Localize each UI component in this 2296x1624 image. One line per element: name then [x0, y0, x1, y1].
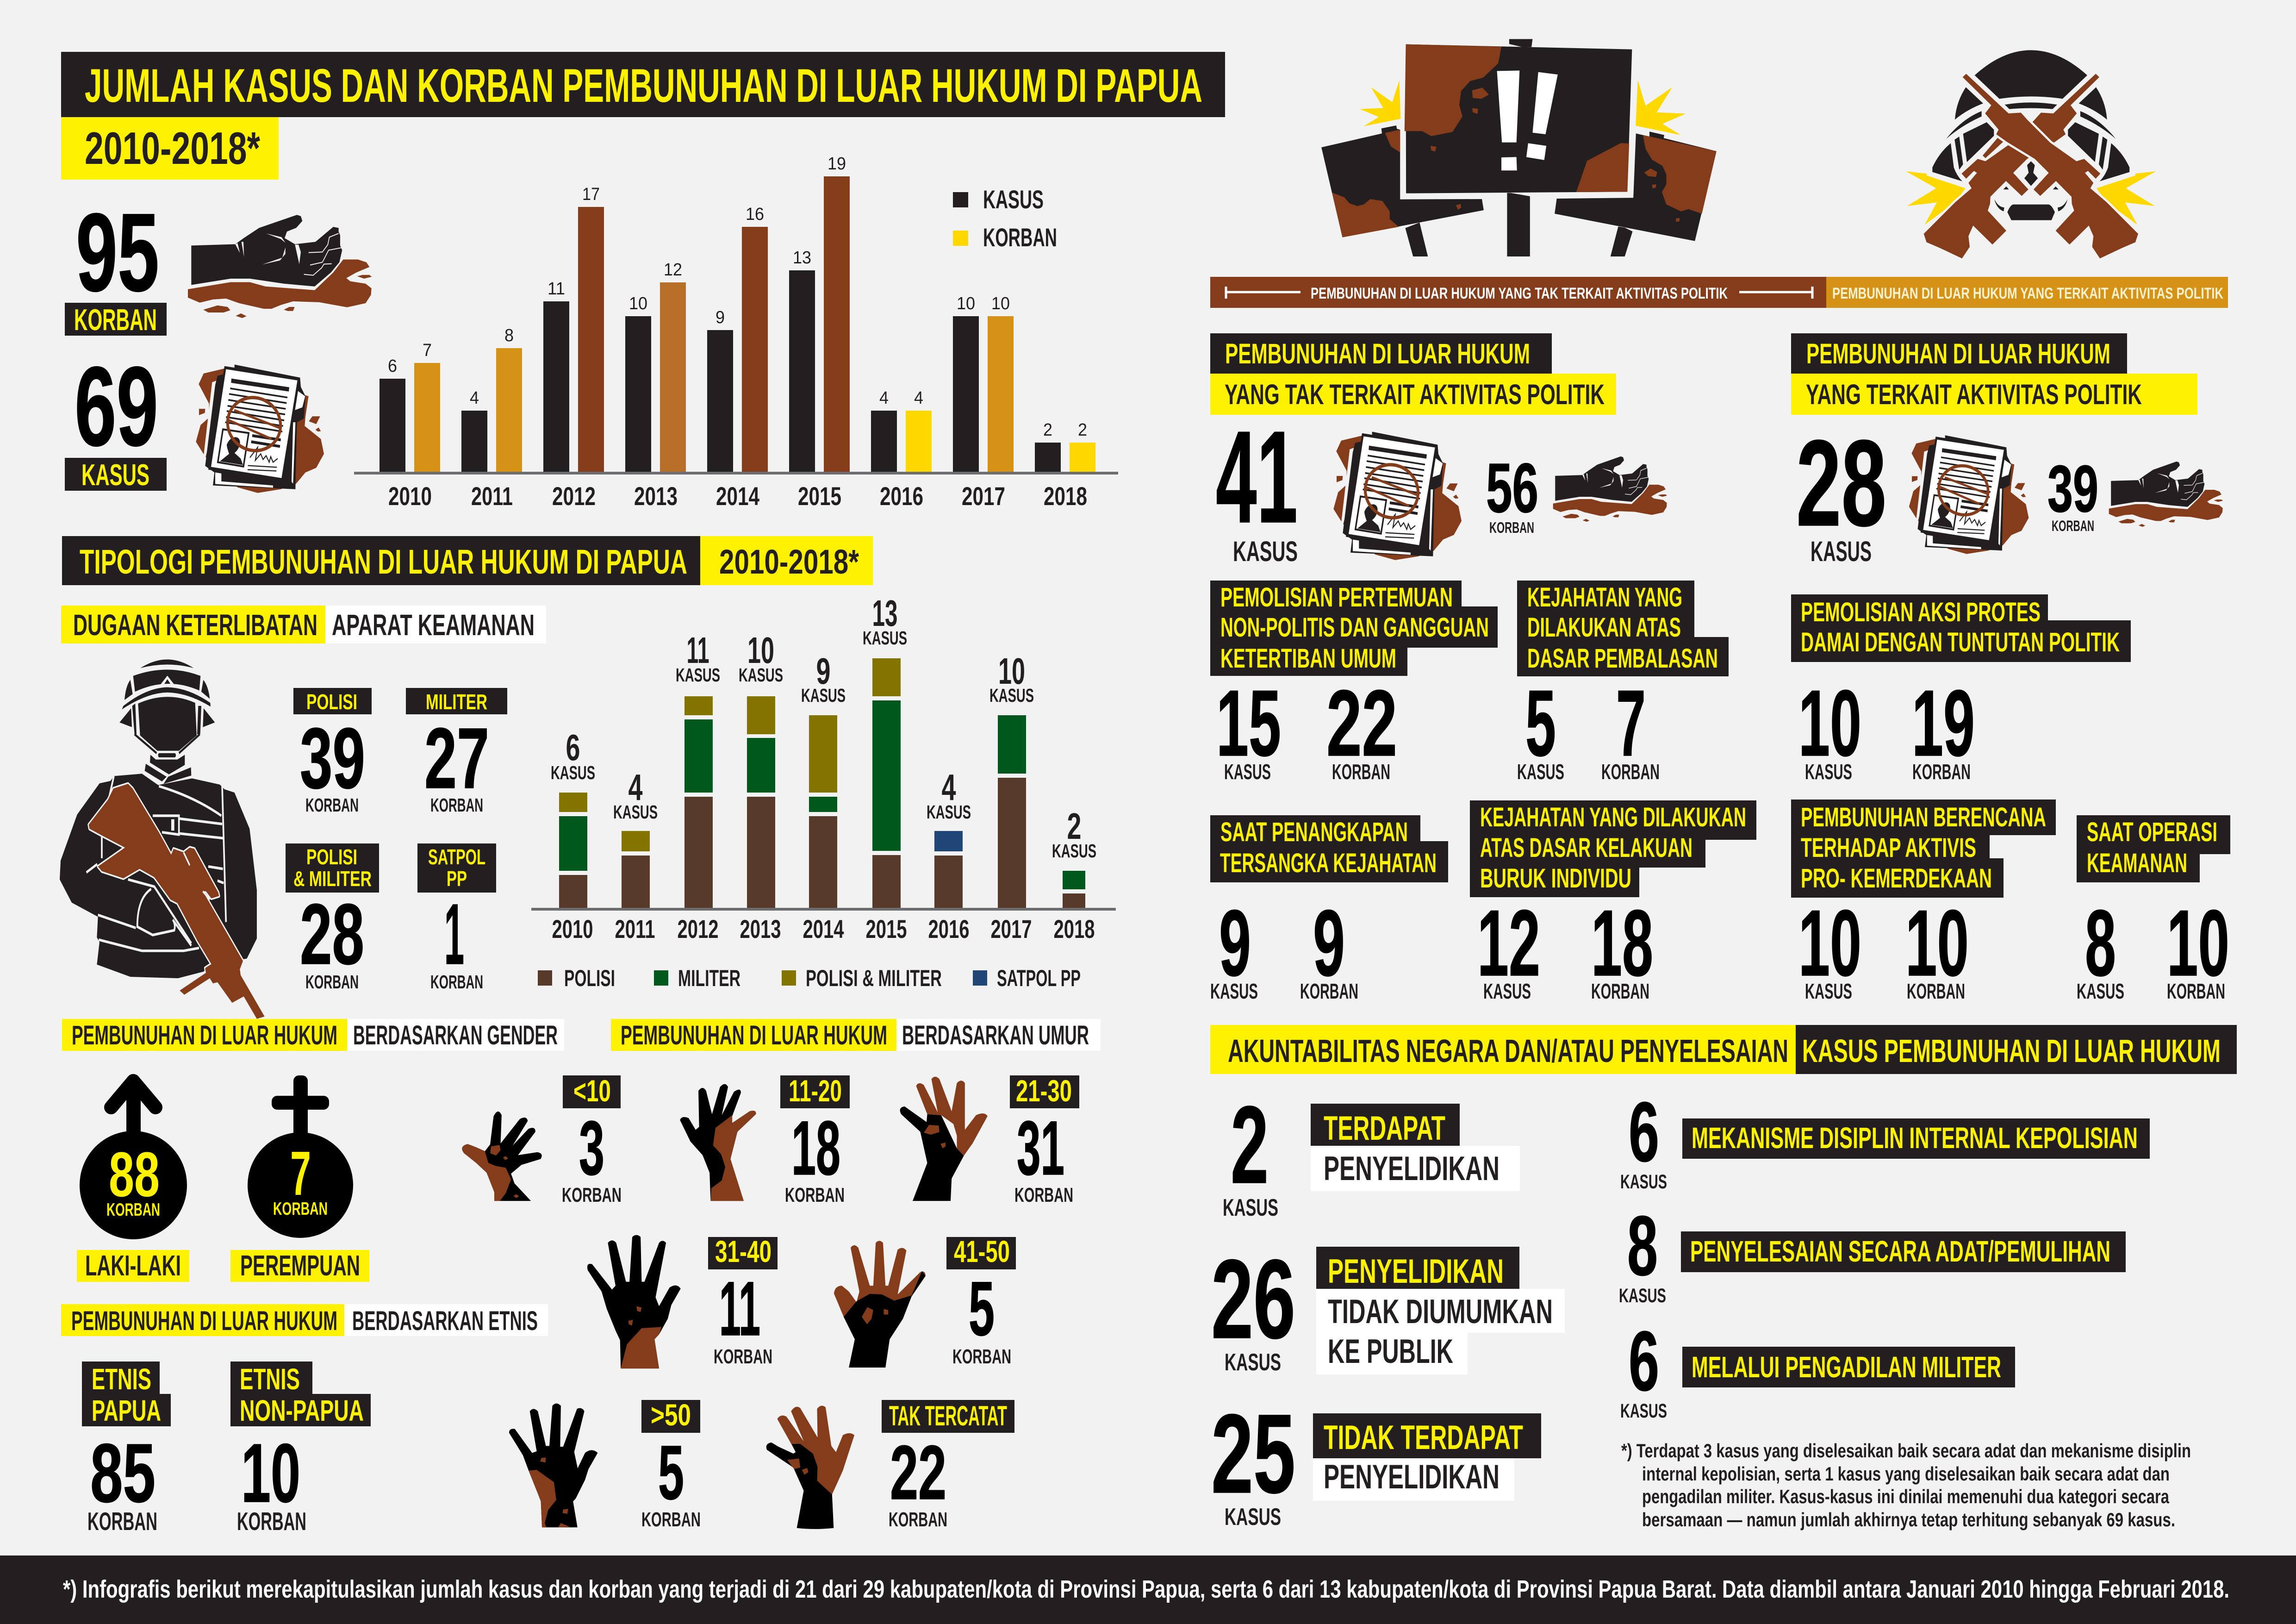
stat: 39 korban: [2047, 452, 2098, 534]
stacked bar chart: keterlibatan per tahun: 2012: [678, 914, 718, 943]
stacked bar chart: keterlibatan per tahun: 4: [941, 767, 956, 808]
icon: hand 11-20: [680, 1084, 756, 1201]
panel: pemolisian pertemuan: KASUS: [1224, 760, 1271, 784]
subheading: gender: PEMBUNUHAN DI LUAR HUKUM: [72, 1020, 337, 1050]
stat: polisi & militer 28 korban: KORBAN: [305, 971, 359, 993]
stat: usia 31-40: [708, 1234, 778, 1368]
stacked bar chart: keterlibatan per tahun: 9: [816, 650, 830, 692]
label: perempuan: PEREMPUAN: [240, 1250, 360, 1282]
panel: pemolisian pertemuan: PEMOLISIAN PERTEMUAN: [1220, 582, 1453, 612]
icon: female symbol 7 korban: 7: [290, 1138, 311, 1208]
stat: polisi & militer 28 korban: [286, 843, 379, 993]
bar chart: kasus and korban per year: 6: [388, 356, 397, 376]
bar chart: kasus and korban per year: 2017: [962, 481, 1005, 511]
bar chart: kasus and korban per year: 17: [582, 185, 600, 204]
panel: saat penangkapan: TERSANGKA KEJAHATAN: [1220, 848, 1437, 878]
panel: kejahatan pembalasan: DILAKUKAN ATAS: [1527, 612, 1681, 643]
stat: 2 kasus terdapat penyelidikan: 2: [1231, 1084, 1269, 1206]
panel: kejahatan pembalasan: [1517, 581, 1729, 784]
stat: 2 kasus terdapat penyelidikan: TERDAPAT: [1324, 1110, 1445, 1147]
stat: etnis non-papua 10 korban: NON-PAPUA: [240, 1394, 364, 1427]
subheading: gender: BERDASARKAN GENDER: [353, 1020, 558, 1050]
stat: etnis non-papua 10 korban: ETNIS: [240, 1362, 300, 1396]
bar chart: kasus and korban per year: 10: [991, 294, 1010, 313]
panel: kelakuan buruk individu: BURUK INDIVIDU: [1480, 863, 1631, 893]
panel: pemolisian pertemuan: 15: [1216, 671, 1281, 776]
panel: pembunuhan berencana: KASUS: [1805, 979, 1852, 1003]
stat: militer 27 korban: MILITER: [426, 690, 487, 714]
subheading: umur: BERDASARKAN UMUR: [902, 1020, 1089, 1050]
stat: usia 31-40: 31-40: [715, 1234, 772, 1268]
panel: kelakuan buruk individu: ATAS DASAR KELAKUAN: [1480, 833, 1692, 863]
stat: 26 kasus tidak diumumkan: PENYELIDIKAN: [1328, 1253, 1504, 1290]
stat: polisi & militer 28 korban: 28: [300, 887, 364, 982]
panel: kelakuan buruk individu: KASUS: [1483, 979, 1531, 1003]
panel: pemolisian aksi protes: [1791, 594, 2131, 784]
panel: saat operasi keamanan: 8: [2085, 891, 2116, 996]
stat: 56 korban: KORBAN: [1489, 519, 1534, 536]
label: perempuan: [230, 1250, 369, 1282]
stat: 6 kasus pengadilan militer: MELALUI PENGADILAN MILITER: [1692, 1350, 2001, 1384]
title period badge: [61, 117, 279, 180]
panel: pemolisian pertemuan: KETERTIBAN UMUM: [1220, 643, 1396, 674]
bar chart: kasus and korban per year: 4: [914, 388, 923, 408]
stat: usia 21-30: KORBAN: [1014, 1184, 1073, 1206]
heading: tak terkait aktivitas politik: PEMBUNUHAN DI LUAR HUKUM: [1225, 338, 1530, 369]
stat: 6 kasus mekanisme disiplin: [1620, 1084, 2150, 1193]
stacked bar chart: keterlibatan per tahun: KASUS: [863, 627, 907, 649]
icon: case documents left: [1333, 432, 1462, 560]
heading: terkait aktivitas politik: PEMBUNUHAN DI LUAR HUKUM: [1806, 338, 2110, 369]
stat: satpol pp 1 korban: PP: [447, 867, 467, 891]
panel: saat operasi keamanan: 10: [2167, 891, 2229, 996]
icon: protest signs: [1321, 39, 1717, 256]
stat: usia 21-30: 21-30: [1016, 1074, 1072, 1108]
icon: male symbol 88 korban: 88: [109, 1139, 160, 1210]
stat: etnis non-papua 10 korban: 10: [241, 1427, 300, 1520]
panel: saat penangkapan: [1210, 815, 1448, 1003]
stacked bar chart: keterlibatan per tahun: KASUS: [551, 762, 595, 783]
bar chart: kasus and korban per year: 2012: [552, 481, 596, 511]
bar chart: kasus and korban per year: 8: [504, 326, 514, 345]
stat: 69 kasus: KASUS: [81, 458, 149, 492]
icon: hand 31-40: [587, 1235, 681, 1368]
stat: 26 kasus tidak diumumkan: [1211, 1237, 1565, 1376]
legend: kasus korban: KORBAN: [983, 223, 1057, 252]
bar chart: kasus and korban per year: 13: [793, 248, 811, 268]
stat: usia 31-40: 11: [719, 1266, 760, 1352]
stat: usia 21-30: [1010, 1074, 1079, 1206]
stat: 69 kasus: 69: [75, 343, 158, 469]
legend: keterlibatan: [538, 965, 1081, 991]
bar chart: kasus and korban per year: 2013: [634, 481, 678, 511]
stat: militer 27 korban: KORBAN: [430, 794, 483, 816]
stat: etnis papua 85 korban: PAPUA: [92, 1394, 161, 1427]
band: kategori kasus: [1210, 277, 2228, 308]
stacked bar chart: keterlibatan per tahun: 10: [747, 630, 774, 671]
panel: saat penangkapan: 9: [1313, 891, 1345, 996]
stacked bar chart: keterlibatan per tahun: KASUS: [1052, 840, 1096, 862]
stat: satpol pp 1 korban: [417, 843, 496, 993]
panel: saat penangkapan: 9: [1219, 891, 1251, 996]
panel: pemolisian aksi protes: 19: [1912, 671, 1975, 776]
panel: pemolisian aksi protes: DAMAI DENGAN TUNTUTAN POLITIK: [1801, 627, 2120, 657]
panel: kelakuan buruk individu: KORBAN: [1591, 979, 1649, 1003]
stat: etnis non-papua 10 korban: [230, 1362, 371, 1536]
stat: tak tercatat: 22: [890, 1430, 946, 1516]
subheading: etnis: BERDASARKAN ETNIS: [352, 1306, 538, 1336]
stat: polisi 39 korban: 39: [300, 711, 365, 806]
panel: pemolisian aksi protes: 10: [1798, 671, 1861, 776]
stat: usia over 50: KORBAN: [641, 1508, 701, 1531]
stat: 56 korban: [1486, 449, 1538, 536]
stacked bar chart: keterlibatan per tahun: 4: [628, 767, 643, 808]
stat: 41 kasus: KASUS: [1233, 536, 1298, 567]
panel: saat penangkapan: SAAT PENANGKAPAN: [1220, 817, 1408, 847]
stat: 8 kasus penyelesaian adat: 8: [1627, 1198, 1658, 1293]
stat: 39 korban: 39: [2047, 452, 2098, 526]
stacked bar chart: keterlibatan per tahun: 2016: [928, 914, 969, 943]
panel: pembunuhan berencana: PRO- KEMERDEKAAN: [1801, 863, 1992, 893]
panel: pembunuhan berencana: 10: [1905, 891, 1969, 996]
stat: 95 korban: KORBAN: [74, 303, 157, 337]
stat: militer 27 korban: [406, 688, 507, 816]
panel: saat operasi keamanan: SAAT OPERASI: [2087, 817, 2217, 847]
legend: keterlibatan: SATPOL PP: [997, 965, 1081, 991]
stat: satpol pp 1 korban: 1: [444, 887, 464, 982]
bar chart: kasus and korban per year: 12: [664, 260, 682, 280]
heading: akuntabilitas: AKUNTABILITAS NEGARA DAN/ATAU PENYELESAIAN: [1228, 1033, 1788, 1069]
legend: kasus korban: KASUS: [983, 185, 1044, 214]
stacked bar chart: keterlibatan per tahun: [531, 593, 1116, 943]
stat: tak tercatat: TAK TERCATAT: [889, 1400, 1007, 1431]
legend: keterlibatan: POLISI: [564, 965, 615, 991]
stat: usia 11-20: [780, 1074, 850, 1206]
stat: usia over 50: >50: [651, 1398, 691, 1432]
heading: tipologi: TIPOLOGI PEMBUNUHAN DI LUAR HUKUM DI PAPUA: [80, 543, 687, 581]
stacked bar chart: keterlibatan per tahun: 2017: [990, 914, 1032, 943]
bar chart: kasus and korban per year: 19: [828, 154, 846, 174]
panel: pembunuhan berencana: KORBAN: [1907, 979, 1965, 1003]
panel: saat penangkapan: KORBAN: [1300, 979, 1358, 1003]
icon: hand 21-30: [900, 1077, 988, 1201]
bar chart: kasus and korban per year: 10: [629, 294, 647, 313]
stat: usia over 50: [641, 1398, 701, 1531]
stat: 39 korban: KORBAN: [2052, 518, 2094, 534]
bar chart: kasus and korban per year: 2014: [716, 481, 759, 511]
bar chart: kasus and korban per year: 2011: [471, 481, 513, 511]
panel: saat operasi keamanan: KASUS: [2077, 979, 2124, 1003]
bar chart: kasus and korban per year: 9: [716, 308, 725, 327]
stat: 8 kasus penyelesaian adat: [1619, 1198, 2126, 1307]
stacked bar chart: keterlibatan per tahun: 2013: [740, 914, 781, 943]
icon: hand under 10: [462, 1112, 542, 1201]
panel: pemolisian aksi protes: PEMOLISIAN AKSI PROTES: [1801, 597, 2041, 627]
stat: 28 kasus: KASUS: [1811, 536, 1872, 567]
panel: kelakuan buruk individu: KEJAHATAN YANG DILAKUKAN: [1480, 802, 1746, 832]
stacked bar chart: keterlibatan per tahun: 2014: [803, 914, 844, 943]
stacked bar chart: keterlibatan per tahun: KASUS: [927, 801, 971, 823]
title banner: [61, 52, 1225, 117]
stacked bar chart: keterlibatan per tahun: KASUS: [801, 685, 846, 706]
stat: polisi 39 korban: KORBAN: [305, 794, 359, 816]
footer note: [0, 1555, 2296, 1624]
icon: hand 41-50: [834, 1241, 926, 1368]
stat: usia 41-50: [946, 1234, 1016, 1368]
icon: fallen hand right: [2109, 462, 2223, 527]
bar chart: kasus and korban per year: 16: [746, 205, 764, 224]
stat: 6 kasus mekanisme disiplin: KASUS: [1620, 1171, 1667, 1193]
bar chart: kasus and korban per year: 2010: [388, 481, 432, 511]
panel: pembunuhan berencana: 10: [1798, 891, 1861, 996]
stat: 28 kasus: 28: [1796, 415, 1886, 552]
bar chart: kasus and korban per year: 10: [957, 294, 975, 313]
stat: etnis papua 85 korban: ETNIS: [92, 1362, 151, 1396]
stacked bar chart: keterlibatan per tahun: 13: [872, 593, 898, 634]
stat: usia 41-50: 41-50: [954, 1234, 1010, 1268]
icon: male symbol 88 korban: KORBAN: [106, 1200, 160, 1220]
icon: male symbol 88 korban: [80, 1081, 187, 1239]
stat: usia 11-20: 11-20: [789, 1074, 842, 1108]
stat: 26 kasus tidak diumumkan: KE PUBLIK: [1328, 1333, 1453, 1370]
bar chart: kasus and korban per year: 2018: [1044, 481, 1087, 511]
band: kategori kasus: PEMBUNUHAN DI LUAR HUKUM YANG TAK TERKAIT AKTIVITAS POLITIK: [1311, 285, 1728, 302]
footnote: internal kepolisian, serta 1 kasus yang diselesaikan baik secara adat dan: [1642, 1463, 2170, 1485]
icon: case documents right: [1909, 435, 2028, 554]
stacked bar chart: keterlibatan per tahun: 10: [998, 650, 1025, 692]
bar chart: kasus and korban per year: 2: [1078, 420, 1087, 440]
panel: kelakuan buruk individu: 12: [1477, 891, 1540, 996]
bar chart: kasus and korban per year: 4: [879, 388, 889, 408]
panel: saat operasi keamanan: KEAMANAN: [2087, 848, 2187, 878]
stat: 8 kasus penyelesaian adat: KASUS: [1619, 1285, 1666, 1307]
bar chart: kasus and korban per year: 2: [1043, 420, 1052, 440]
stacked bar chart: keterlibatan per tahun: 2: [1067, 806, 1081, 847]
heading: terkait aktivitas politik: YANG TERKAIT AKTIVITAS POLITIK: [1806, 379, 2142, 410]
stacked bar chart: keterlibatan per tahun: KASUS: [613, 801, 658, 823]
icon: fallen hand left: [1553, 456, 1667, 522]
heading: tak terkait aktivitas politik: [1210, 333, 1616, 415]
panel: pembunuhan berencana: [1791, 800, 2056, 1003]
icon: hand tak tercatat: [766, 1406, 854, 1529]
stat: usia under 10: <10: [573, 1074, 611, 1108]
panel: pembunuhan berencana: PEMBUNUHAN BERENCANA: [1801, 802, 2046, 832]
stacked bar chart: keterlibatan per tahun: KASUS: [739, 664, 783, 686]
stat: 26 kasus tidak diumumkan: KASUS: [1225, 1349, 1281, 1376]
stat: 2 kasus terdapat penyelidikan: PENYELIDIKAN: [1324, 1150, 1500, 1187]
stat: 2 kasus terdapat penyelidikan: [1223, 1084, 1520, 1221]
stat: 25 kasus tidak terdapat penyelidikan: [1211, 1391, 1541, 1530]
stacked bar chart: keterlibatan per tahun: 2015: [865, 914, 907, 943]
bar chart: kasus and korban per year: 2016: [880, 481, 923, 511]
stat: etnis papua 85 korban: [82, 1362, 171, 1536]
stat: usia under 10: [562, 1074, 622, 1206]
stacked bar chart: keterlibatan per tahun: 2010: [552, 914, 593, 943]
stat: 25 kasus tidak terdapat penyelidikan: PENYELIDIKAN: [1324, 1458, 1500, 1496]
panel: saat operasi keamanan: [2077, 815, 2230, 1003]
panel: kejahatan pembalasan: DASAR PEMBALASAN: [1527, 643, 1718, 674]
title banner: JUMLAH KASUS DAN KORBAN PEMBUNUHAN DI LUAR HUKUM DI PAPUA: [85, 59, 1202, 112]
stat: 26 kasus tidak diumumkan: 26: [1211, 1237, 1295, 1362]
subheading: etnis: PEMBUNUHAN DI LUAR HUKUM: [71, 1306, 337, 1336]
stacked bar chart: keterlibatan per tahun: 2011: [615, 914, 655, 943]
stat: usia 11-20: 18: [791, 1106, 840, 1191]
stat: 28 kasus: [1796, 415, 1886, 567]
stat: 6 kasus pengadilan militer: KASUS: [1620, 1400, 1667, 1422]
panel: pemolisian pertemuan: NON-POLITIS DAN GANGGUAN: [1220, 612, 1489, 643]
heading: terkait aktivitas politik: [1791, 333, 2197, 415]
panel: pemolisian pertemuan: [1210, 581, 1498, 784]
stat: 41 kasus: 41: [1216, 404, 1298, 550]
heading: tak terkait aktivitas politik: YANG TAK TERKAIT AKTIVITAS POLITIK: [1225, 379, 1605, 410]
panel: saat operasi keamanan: KORBAN: [2167, 979, 2225, 1003]
subheading: dugaan keterlibatan: DUGAAN KETERLIBATAN: [73, 608, 317, 642]
stat: 56 korban: 56: [1486, 449, 1538, 527]
legend: kasus korban: [953, 185, 1057, 252]
stacked bar chart: keterlibatan per tahun: 11: [687, 630, 709, 671]
stat: 41 kasus: [1216, 404, 1298, 567]
icon: case documents: [196, 365, 324, 493]
subheading: dugaan keterlibatan: [61, 606, 546, 643]
stat: 6 kasus mekanisme disiplin: 6: [1629, 1084, 1659, 1179]
stat: 25 kasus tidak terdapat penyelidikan: TIDAK TERDAPAT: [1324, 1419, 1523, 1456]
stat: 25 kasus tidak terdapat penyelidikan: KASUS: [1225, 1504, 1281, 1530]
bar chart: kasus and korban per year: 2015: [798, 481, 841, 511]
stat: usia 41-50: KORBAN: [952, 1345, 1011, 1368]
stat: usia under 10: 3: [579, 1106, 604, 1191]
footnote: [1621, 1440, 2191, 1530]
panel: kejahatan pembalasan: KASUS: [1517, 760, 1564, 784]
subheading: umur: PEMBUNUHAN DI LUAR HUKUM: [621, 1020, 887, 1050]
panel: kelakuan buruk individu: 18: [1591, 891, 1653, 996]
title period badge: 2010-2018*: [85, 123, 261, 174]
icon: female symbol 7 korban: [248, 1075, 353, 1238]
bar chart: kasus and korban per year: 11: [548, 279, 565, 299]
stat: polisi & militer 28 korban: & MILITER: [293, 867, 372, 891]
stat: etnis papua 85 korban: 85: [90, 1427, 156, 1520]
stat: usia 41-50: 5: [969, 1266, 995, 1352]
panel: pembunuhan berencana: TERHADAP AKTIVIS: [1801, 833, 1976, 863]
bar chart: kasus and korban per year: [354, 154, 1118, 511]
icon: fallen hand: [188, 215, 372, 318]
label: laki-laki: [77, 1250, 189, 1282]
stat: usia under 10: KORBAN: [562, 1184, 622, 1206]
panel: pemolisian aksi protes: KASUS: [1805, 760, 1852, 784]
stat: tak tercatat: KORBAN: [889, 1508, 947, 1531]
stat: militer 27 korban: 27: [424, 711, 489, 806]
stat: 26 kasus tidak diumumkan: TIDAK DIUMUMKAN: [1328, 1293, 1553, 1330]
stat: 69 kasus: [65, 343, 167, 492]
label: laki-laki: LAKI-LAKI: [85, 1250, 181, 1282]
panel: saat penangkapan: KASUS: [1210, 979, 1258, 1003]
stacked bar chart: keterlibatan per tahun: 6: [566, 727, 580, 768]
stat: usia 11-20: KORBAN: [785, 1184, 845, 1206]
stacked bar chart: keterlibatan per tahun: KASUS: [676, 664, 720, 686]
stacked bar chart: keterlibatan per tahun: KASUS: [989, 685, 1034, 706]
stat: usia 31-40: KORBAN: [714, 1345, 772, 1368]
stat: 6 kasus pengadilan militer: [1620, 1313, 2015, 1422]
stat: etnis papua 85 korban: KORBAN: [87, 1507, 157, 1536]
panel: pemolisian pertemuan: 22: [1326, 671, 1397, 776]
stat: 95 korban: [65, 190, 167, 337]
stat: 6 kasus pengadilan militer: 6: [1629, 1313, 1659, 1408]
heading: tipologi: 2010-2018*: [719, 543, 859, 581]
panel: kejahatan pembalasan: 7: [1616, 671, 1646, 776]
panel: kejahatan pembalasan: KORBAN: [1601, 760, 1660, 784]
heading: akuntabilitas: [1210, 1025, 2237, 1074]
icon: armed soldier: [60, 660, 265, 1019]
panel: pemolisian pertemuan: KORBAN: [1332, 760, 1390, 784]
subheading: dugaan keterlibatan: APARAT KEAMANAN: [332, 608, 535, 642]
stat: satpol pp 1 korban: KORBAN: [430, 971, 483, 993]
stacked bar chart: keterlibatan per tahun: 2018: [1053, 914, 1095, 943]
stat: usia over 50: 5: [658, 1430, 684, 1516]
stat: 25 kasus tidak terdapat penyelidikan: 25: [1211, 1391, 1295, 1517]
panel: kejahatan pembalasan: KEJAHATAN YANG: [1527, 582, 1682, 612]
stat: polisi & militer 28 korban: POLISI: [306, 845, 357, 869]
bar chart: kasus and korban per year: 4: [470, 388, 479, 408]
stat: satpol pp 1 korban: SATPOL: [428, 845, 485, 869]
panel: kelakuan buruk individu: [1470, 800, 1756, 1003]
icon: female symbol 7 korban: KORBAN: [273, 1199, 328, 1219]
stat: 2 kasus terdapat penyelidikan: KASUS: [1223, 1194, 1278, 1221]
icon: helmet and crossed rifles: [1906, 50, 2156, 258]
stat: polisi 39 korban: POLISI: [306, 690, 357, 714]
icon: hand over 50: [509, 1404, 597, 1527]
legend: keterlibatan: POLISI & MILITER: [806, 965, 942, 991]
legend: keterlibatan: MILITER: [678, 965, 740, 991]
stat: etnis non-papua 10 korban: KORBAN: [237, 1507, 306, 1536]
bar chart: kasus and korban per year: 7: [423, 341, 432, 360]
stat: tak tercatat: [882, 1400, 1014, 1531]
panel: pemolisian aksi protes: KORBAN: [1912, 760, 1971, 784]
stat: polisi 39 korban: [293, 688, 372, 816]
panel: kejahatan pembalasan: 5: [1525, 671, 1556, 776]
stat: usia 21-30: 31: [1017, 1106, 1064, 1191]
stat: 95 korban: 95: [76, 190, 159, 314]
